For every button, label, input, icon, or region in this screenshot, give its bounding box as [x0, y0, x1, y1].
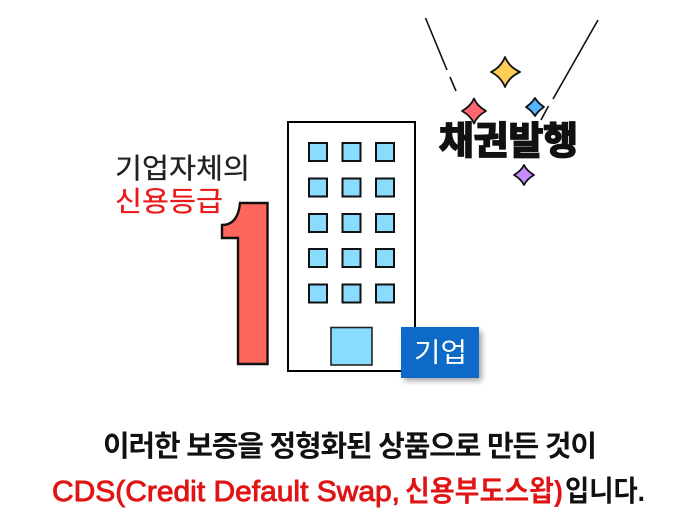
- company badge: [401, 327, 482, 381]
- icon: yellow sparkle: [491, 57, 520, 87]
- caption line two: 신용부도스왑): [405, 475, 563, 508]
- label: credit rating: 신용등급: [115, 186, 223, 217]
- icon: red sparkle: [462, 98, 486, 124]
- heading: bond issuance: 채권발행: [439, 121, 578, 163]
- building windows: [309, 143, 394, 302]
- caption line one: 이러한 보증을 정형화된 상품으로 만든 것이: [103, 430, 597, 463]
- building door: [331, 328, 372, 365]
- icon: purple sparkle: [514, 165, 534, 185]
- building: [288, 122, 415, 371]
- spotlight beam lines: [426, 18, 598, 120]
- label: company's own: 기업자체의: [115, 153, 250, 184]
- caption line two: CDS(Credit Default Swap,: [52, 476, 400, 508]
- numeral one: [222, 203, 268, 364]
- caption line two: [52, 475, 645, 508]
- icon: blue sparkle: [526, 98, 544, 116]
- company badge: 기업: [414, 338, 467, 368]
- caption line two: 입니다.: [565, 475, 645, 508]
